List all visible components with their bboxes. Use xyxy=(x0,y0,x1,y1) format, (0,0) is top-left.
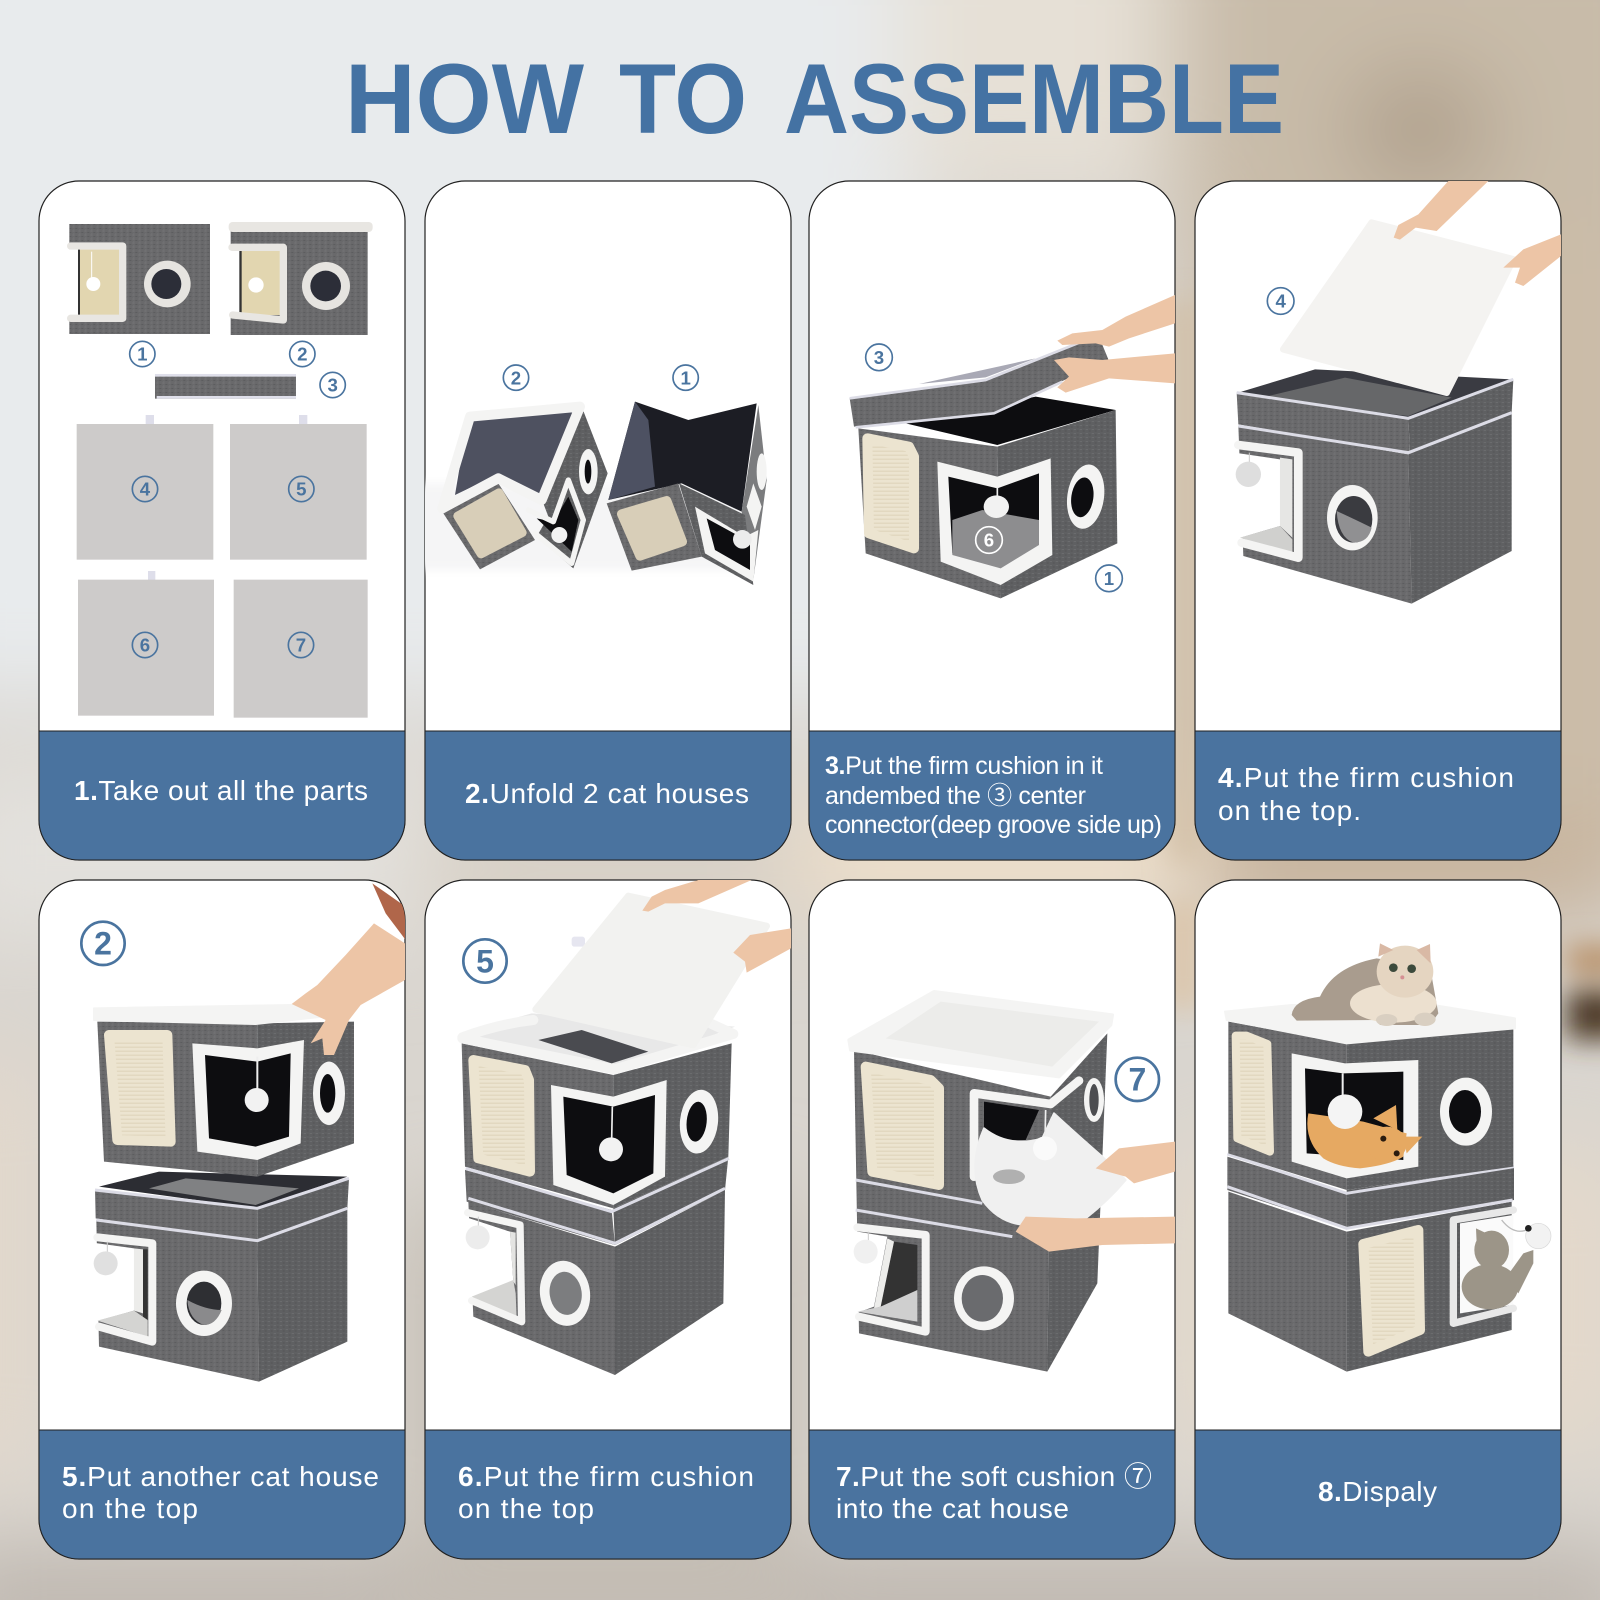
caption text: 5.Put another cat house xyxy=(62,1461,379,1492)
panel: step 3 firm cushion and center connector xyxy=(809,181,1175,860)
caption text: connector(deep groove side up) xyxy=(825,811,1162,839)
hair xyxy=(372,883,406,940)
number 2 xyxy=(503,365,529,390)
caption text: 7.Put the soft cushion ⑦ xyxy=(836,1461,1152,1492)
center connector lid xyxy=(850,335,1108,427)
orange cat xyxy=(1307,1105,1422,1168)
hands xyxy=(1054,295,1175,393)
caption band xyxy=(39,731,405,860)
caption text: 1.Take out all the parts xyxy=(74,775,368,806)
number 6 xyxy=(976,527,1002,553)
caption text: 3.Put the firm cushion in it xyxy=(825,752,1103,780)
toy ball on string xyxy=(1328,1073,1362,1129)
lower house xyxy=(92,1172,349,1382)
hands xyxy=(642,880,791,973)
caption band xyxy=(1195,1430,1561,1559)
part 2 cat house panel xyxy=(229,222,373,335)
house 1 unfolded xyxy=(607,402,767,585)
hands xyxy=(1394,181,1561,286)
firm cushion xyxy=(536,896,767,1045)
stacked houses and cushion illustration xyxy=(462,880,791,1375)
number 7 xyxy=(288,632,314,658)
number 5 xyxy=(289,476,314,502)
number 3: 3 xyxy=(874,347,884,368)
caption text: on the top. xyxy=(1218,795,1361,826)
panel: step 8 display xyxy=(1195,880,1561,1559)
number 3: 3 xyxy=(327,375,338,396)
number 2 xyxy=(290,341,315,367)
panel: step 7 soft cushion into house xyxy=(809,880,1175,1559)
panel: step 6 firm cushion on top xyxy=(425,880,791,1559)
open box xyxy=(858,397,1117,598)
title: ASSEMBLE xyxy=(784,43,1284,154)
title: HOW xyxy=(345,43,585,154)
house stack xyxy=(849,992,1112,1372)
number 2: 2 xyxy=(297,344,308,365)
hands xyxy=(1016,1142,1175,1252)
number 5 xyxy=(463,939,507,983)
caption band xyxy=(39,1430,405,1559)
finished cat house illustration xyxy=(1225,943,1551,1372)
box with connector illustration xyxy=(850,295,1175,598)
number 4: 4 xyxy=(1275,291,1286,312)
stack with soft cushion illustration xyxy=(849,992,1175,1372)
number 7 xyxy=(1116,1058,1159,1101)
number 1: 1 xyxy=(680,367,691,388)
caption text: 2.Unfold 2 cat houses xyxy=(465,778,749,809)
caption text: andembed the ③ center xyxy=(825,782,1086,810)
caption band xyxy=(809,731,1175,860)
panel: step 4 firm cushion on top xyxy=(1195,181,1561,860)
soft cushion xyxy=(975,1110,1126,1225)
caption band xyxy=(425,731,791,860)
number 4: 4 xyxy=(140,479,151,500)
number 1 xyxy=(1096,565,1122,592)
number 1: 1 xyxy=(137,344,148,365)
house stack xyxy=(462,1013,735,1375)
caption text: 8.Dispaly xyxy=(1318,1476,1437,1507)
number 4 xyxy=(1267,288,1294,314)
caption text: 4.Put the firm cushion xyxy=(1218,762,1514,793)
panel: step 1 take out all the parts xyxy=(39,181,405,860)
number 6: 6 xyxy=(984,530,994,551)
caption band xyxy=(809,1430,1175,1559)
caption band xyxy=(425,1430,791,1559)
number 5: 5 xyxy=(296,479,307,500)
number 7: 7 xyxy=(1128,1062,1146,1098)
house lower storey xyxy=(1227,1154,1514,1372)
number 2: 2 xyxy=(94,926,112,962)
caption text: on the top xyxy=(458,1493,594,1524)
stacked houses illustration xyxy=(81,883,406,1382)
upper house xyxy=(94,1005,354,1177)
number 6 xyxy=(132,632,158,658)
hands xyxy=(292,923,405,1055)
hanging ball xyxy=(1502,1220,1551,1249)
box and cushion illustration xyxy=(1234,181,1561,604)
panel: step 2 unfold cat houses xyxy=(412,181,791,860)
part 1 cat house panel xyxy=(68,224,210,334)
number 6: 6 xyxy=(140,635,150,656)
caption text: on the top xyxy=(62,1493,198,1524)
number 2 xyxy=(81,922,125,965)
number 2: 2 xyxy=(511,367,521,388)
number 3 xyxy=(320,372,345,398)
soft shadow xyxy=(412,483,745,570)
top cat xyxy=(1292,943,1438,1026)
unfolded houses illustration xyxy=(412,365,767,585)
title: TO xyxy=(619,43,747,154)
caption band xyxy=(1195,731,1561,860)
house 2 unfolded xyxy=(442,405,608,569)
panel: step 5 another cat house on top xyxy=(39,880,406,1559)
number 1: 1 xyxy=(1104,568,1114,589)
parts 4 to 7 cushions xyxy=(77,415,368,718)
caption text: into the cat house xyxy=(836,1493,1069,1524)
number 3 xyxy=(866,344,892,371)
number 1 xyxy=(673,365,698,390)
number 7: 7 xyxy=(296,635,306,656)
number 4 xyxy=(132,476,158,502)
part 3 center connector xyxy=(155,374,296,399)
caption text: 6.Put the firm cushion xyxy=(458,1461,754,1492)
grey cat xyxy=(1462,1228,1533,1309)
house upper storey xyxy=(1225,1005,1515,1190)
number 1 xyxy=(130,341,155,367)
parts illustration xyxy=(68,222,373,718)
number 5: 5 xyxy=(476,943,494,979)
lower box xyxy=(1234,369,1513,604)
firm cushion xyxy=(1283,223,1513,393)
